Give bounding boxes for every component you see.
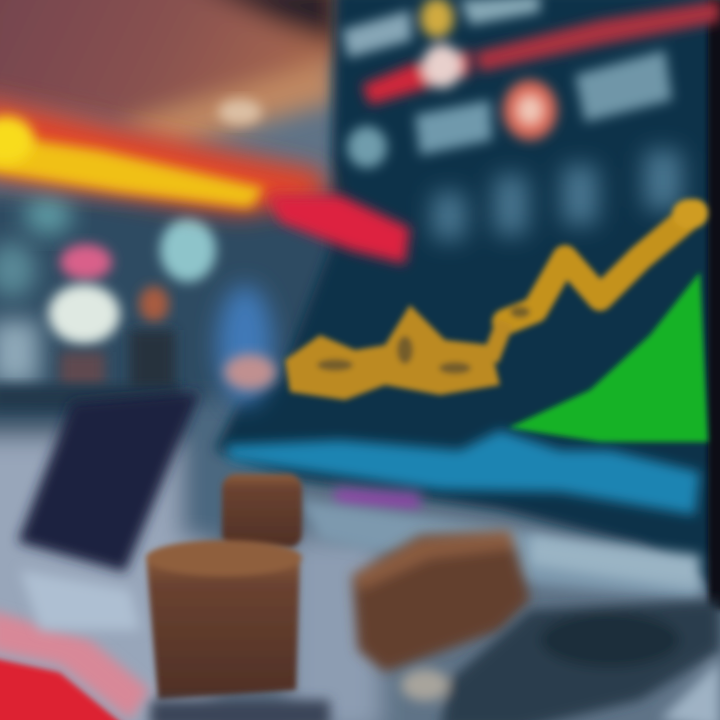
- ceiling: [0, 0, 350, 150]
- red object bottom left: [0, 610, 150, 720]
- phone: [18, 392, 200, 572]
- monitor: [215, 0, 720, 610]
- peach glow at chart start: [224, 354, 276, 390]
- top ticker tiles: [342, 0, 720, 168]
- coin stack right: [352, 530, 530, 672]
- blue glow left of monitor: [217, 285, 273, 405]
- desk items bottom right: [150, 600, 720, 720]
- ceiling light: [218, 99, 262, 125]
- dark speckles in line: [317, 306, 530, 374]
- lower monitor bezel: [300, 500, 700, 600]
- figures on the left: [0, 195, 216, 410]
- yellow and red banner: [0, 95, 410, 264]
- light desk left: [20, 570, 140, 630]
- blue area chart: [225, 430, 700, 515]
- faint data columns: [432, 150, 682, 240]
- gold line chart: [285, 199, 708, 400]
- green area chart: [508, 272, 708, 442]
- coin stack large: [146, 540, 302, 700]
- coin stack small: [222, 474, 302, 548]
